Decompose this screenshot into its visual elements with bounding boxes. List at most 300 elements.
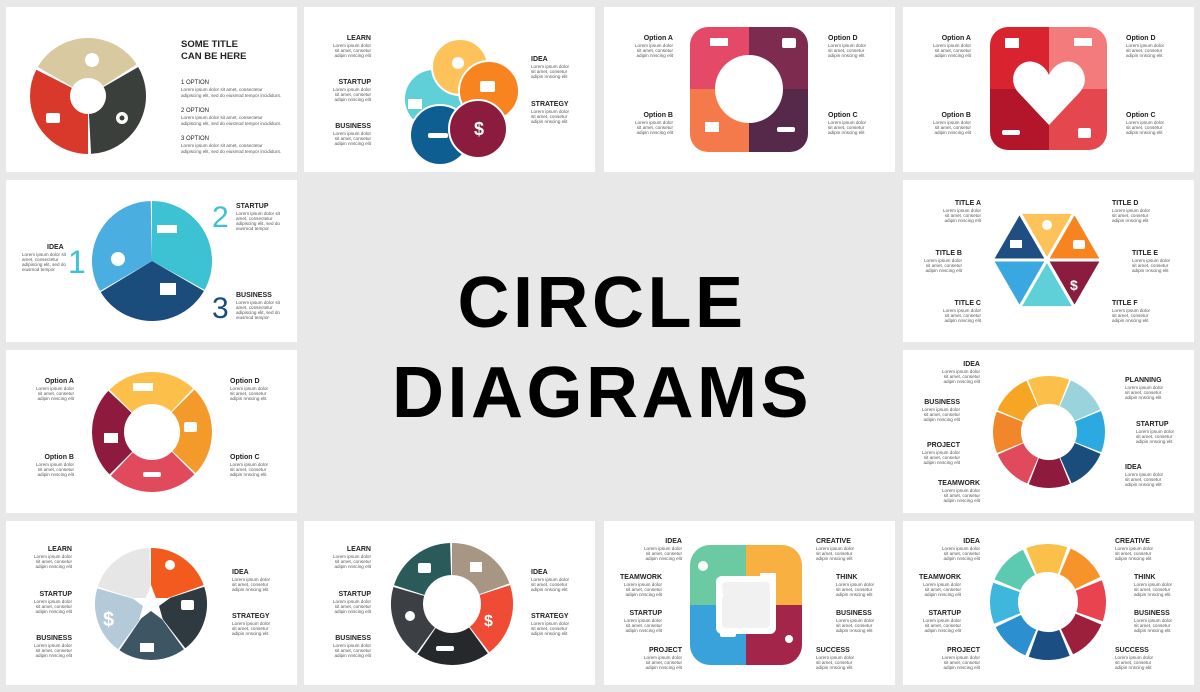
labels: IDEA	[963, 361, 980, 368]
labels: IDEA	[665, 538, 682, 545]
labels: sit amet, consetur	[944, 660, 980, 665]
panel: square weave	[604, 521, 895, 685]
labels: STARTUP	[629, 610, 662, 617]
labels: Lorem ipsum dolor	[1134, 618, 1173, 623]
labels: sit amet, consetur	[925, 587, 961, 592]
labels: TEAMWORK	[938, 480, 980, 487]
options text: 1 OPTION	[181, 80, 209, 86]
diagram: pie	[111, 220, 193, 302]
diagram: swirl ring	[994, 377, 1104, 487]
labels: Lorem ipsum dolor	[624, 582, 662, 587]
labels: adipin nnscing elit	[1125, 482, 1162, 487]
labels	[620, 538, 875, 670]
labels: adipin nnscing elit	[1126, 53, 1163, 58]
labels: sit amet, consetur	[944, 493, 980, 498]
labels: IDEA	[531, 569, 548, 576]
labels: sit amet, consetur	[1132, 263, 1169, 268]
labels: Lorem ipsum dolor	[230, 386, 269, 391]
labels: sit amet, consetur	[1134, 587, 1171, 592]
labels: BUSINESS	[924, 399, 960, 406]
labels: adipin nnscing elit	[230, 472, 267, 477]
labels: sit amet, consetur	[335, 559, 371, 564]
panel: blue pie	[6, 180, 297, 342]
labels: Lorem ipsum dolor	[635, 43, 673, 48]
labels: adipin nnscing elit	[1112, 218, 1149, 223]
labels: adipin nnscing elit	[924, 592, 962, 597]
labels: adipin nnscing elit	[943, 498, 981, 503]
labels: adipin nnscing elit	[836, 628, 873, 633]
labels: sit amet, consetur	[531, 582, 568, 587]
labels: sit amet, consetur	[935, 125, 971, 130]
title block	[297, 172, 903, 521]
labels: adipin nnscing elit	[35, 609, 73, 614]
labels: sit amet, consetur	[944, 551, 980, 556]
labels: adipin nnscing elit	[816, 665, 853, 670]
labels: sit amet, consetur	[828, 125, 865, 130]
labels: sit amet, consetur	[1126, 48, 1163, 53]
diagram: octagon ring	[990, 544, 1106, 660]
labels: Lorem ipsum dolor	[1125, 385, 1164, 390]
options text: adipiscing elit, sed do eiusmod tempor incididunt.	[181, 121, 281, 126]
labels: sit amet, consetur	[232, 582, 269, 587]
label: startup	[212, 201, 281, 234]
label: business: 3	[212, 292, 229, 325]
labels: STARTUP	[928, 610, 961, 617]
labels: sit amet, consetur	[828, 48, 865, 53]
labels: adipin nnscing elit	[35, 653, 73, 658]
labels: sit amet, consetur	[38, 391, 74, 396]
labels: Lorem ipsum dolor	[933, 43, 971, 48]
title block: CIRCLE	[458, 263, 746, 343]
labels: Lorem ipsum dolor	[333, 599, 371, 604]
labels: adipin nnscing elit	[944, 218, 982, 223]
panel: octagon segments	[903, 521, 1194, 685]
labels: sit amet, consetur	[924, 412, 960, 417]
labels: Lorem ipsum dolor	[624, 618, 662, 623]
labels: Lorem ipsum dolor	[828, 43, 867, 48]
labels: Lorem ipsum dolor	[635, 120, 673, 125]
labels: adipin nnscing elit	[1134, 592, 1171, 597]
labels: Lorem ipsum dolor	[1126, 43, 1165, 48]
icons	[46, 53, 128, 124]
labels: Lorem ipsum dolor	[943, 308, 981, 313]
labels left: sit amet, consetur	[335, 136, 371, 141]
labels: PROJECT	[927, 442, 961, 449]
options text: 2 OPTION	[181, 108, 209, 114]
label: startup: eiusmod tempor	[236, 226, 269, 231]
labels: Option A	[45, 378, 74, 385]
labels: Lorem ipsum dolor	[922, 407, 960, 412]
options text: adipiscing elit, sed do eiusmod tempor incididunt.	[181, 93, 281, 98]
diagram: puzzle ring	[389, 541, 515, 667]
labels: Option C	[1126, 112, 1156, 119]
labels: IDEA	[1125, 464, 1142, 471]
labels: adipin nnscing elit	[334, 564, 372, 569]
labels: Lorem ipsum dolor	[1125, 472, 1164, 477]
panel: eight swirl	[903, 350, 1194, 513]
label: idea: eiusmod tempor	[22, 267, 55, 272]
labels: sit amet, consetur	[626, 587, 662, 592]
label: business: amet, consectetur	[236, 305, 273, 310]
panel: star circle: $	[103, 609, 114, 631]
options text: Lorem ipsum dolor sit amet, consectetur	[181, 143, 263, 148]
labels left: adipin nnscing elit	[334, 53, 372, 58]
labels: SUCCESS	[1115, 647, 1149, 654]
labels: Option D	[230, 378, 260, 385]
labels: Lorem ipsum dolor	[923, 618, 961, 623]
labels: Lorem ipsum dolor	[933, 120, 971, 125]
diagram: five-part pie	[112, 565, 190, 643]
label: business: BUSINESS	[236, 292, 272, 299]
labels: Lorem ipsum dolor	[1112, 308, 1151, 313]
title text: CAN BE HERE	[181, 51, 246, 62]
diagram: overlapping circles	[404, 39, 519, 165]
labels: sit amet, consetur	[637, 125, 673, 130]
labels: Option C	[828, 112, 858, 119]
labels: sit amet, consetur	[230, 391, 267, 396]
labels: sit amet, consetur	[646, 660, 682, 665]
labels: sit amet, consetur	[924, 455, 960, 460]
labels left: Lorem ipsum dolor	[333, 131, 371, 136]
labels: Lorem ipsum dolor	[1112, 208, 1151, 213]
label: idea: 1	[68, 244, 86, 280]
labels: Lorem ipsum dolor	[333, 554, 371, 559]
panel: star circle	[6, 521, 297, 685]
labels: Lorem ipsum dolor	[531, 621, 570, 626]
labels: SUCCESS	[816, 647, 850, 654]
labels left: STARTUP	[338, 79, 371, 86]
labels: Option A	[644, 35, 673, 42]
options text: Lorem ipsum dolor sit amet, consectetur	[181, 115, 263, 120]
labels: Lorem ipsum dolor	[1115, 655, 1154, 660]
labels left: sit amet, consetur	[335, 48, 371, 53]
labels: sit amet, consetur	[944, 374, 980, 379]
labels: TITLE A	[955, 200, 981, 207]
labels: adipin nnscing elit	[1132, 268, 1169, 273]
diagram: square weave: $	[716, 585, 724, 601]
options text: adipiscing elit, sed do eiusmod tempor incididunt.	[181, 149, 281, 154]
labels: IDEA	[963, 538, 980, 545]
diagram: ring	[90, 370, 214, 494]
labels: adipin nnscing elit	[625, 592, 663, 597]
labels: sit amet, consetur	[945, 313, 981, 318]
labels: LEARN	[347, 546, 371, 553]
labels: sit amet, consetur	[531, 626, 568, 631]
labels: IDEA	[232, 569, 249, 576]
label: startup: adipiscing elit, sed do	[236, 221, 280, 226]
labels: Lorem ipsum dolor	[836, 618, 875, 623]
panel: five circles	[304, 7, 595, 172]
labels: Lorem ipsum dolor	[1134, 582, 1173, 587]
labels: adipin nnscing elit	[836, 592, 873, 597]
panel: hexagon triangles	[903, 180, 1194, 342]
labels: PROJECT	[649, 647, 683, 654]
labels: Lorem ipsum dolor	[922, 450, 960, 455]
labels: adipin nnscing elit	[636, 130, 674, 135]
labels	[933, 35, 1165, 135]
labels: sit amet, consetur	[1136, 434, 1173, 439]
labels: Option D	[828, 35, 858, 42]
labels: Lorem ipsum dolor	[34, 554, 72, 559]
labels	[635, 35, 867, 135]
labels: STRATEGY	[232, 613, 270, 620]
labels: sit amet, consetur	[335, 648, 371, 653]
labels: adipin nnscing elit	[645, 665, 683, 670]
labels: CREATIVE	[816, 538, 851, 545]
labels: adipin nnscing elit	[816, 556, 853, 561]
labels: STARTUP	[338, 591, 371, 598]
labels right: sit amet, consetur	[531, 69, 568, 74]
labels left: Lorem ipsum dolor	[333, 87, 371, 92]
labels: adipin nnscing elit	[934, 130, 972, 135]
labels: sit amet, consetur	[1134, 623, 1171, 628]
panel: puzzle ring	[304, 521, 595, 685]
labels right: Lorem ipsum dolor	[531, 109, 570, 114]
labels: TITLE D	[1112, 200, 1138, 207]
labels: sit amet, consetur	[1115, 551, 1152, 556]
labels: adipin nnscing elit	[1136, 439, 1173, 444]
labels: LEARN	[48, 546, 72, 553]
label: startup: Lorem ipsum dolor sit	[236, 211, 281, 216]
labels: adipin nnscing elit	[1115, 665, 1152, 670]
labels: Option B	[44, 454, 74, 461]
labels left	[333, 35, 372, 146]
labels: Lorem ipsum dolor	[232, 577, 271, 582]
labels: adipin nnscing elit	[923, 417, 961, 422]
labels: sit amet, consetur	[935, 48, 971, 53]
panel: puzzle ring: $	[484, 613, 493, 630]
labels: adipin nnscing elit	[232, 587, 269, 592]
labels: adipin nnscing elit	[1125, 395, 1162, 400]
labels right	[531, 56, 570, 124]
labels: Lorem ipsum dolor	[816, 546, 855, 551]
labels: Lorem ipsum dolor	[836, 582, 875, 587]
labels: Option D	[1126, 35, 1156, 42]
labels: STRATEGY	[531, 613, 569, 620]
labels: TEAMWORK	[620, 574, 662, 581]
labels: sit amet, consetur	[836, 587, 873, 592]
labels: sit amet, consetur	[836, 623, 873, 628]
labels: Lorem ipsum dolor	[1132, 258, 1171, 263]
labels: Lorem ipsum dolor	[942, 655, 980, 660]
labels: TITLE B	[936, 250, 962, 257]
labels: sit amet, consetur	[1112, 313, 1149, 318]
labels	[924, 200, 1171, 323]
labels: sit amet, consetur	[1112, 213, 1149, 218]
labels: STARTUP	[1136, 421, 1169, 428]
labels: STARTUP	[39, 591, 72, 598]
labels: BUSINESS	[335, 635, 371, 642]
labels right: adipin nnscing elit	[531, 74, 568, 79]
label: idea: amet, consectetur	[22, 257, 59, 262]
labels: adipin nnscing elit	[944, 318, 982, 323]
title block: DIAGRAMS	[392, 353, 812, 433]
labels: PROJECT	[947, 647, 981, 654]
labels: BUSINESS	[1134, 610, 1170, 617]
labels	[36, 378, 269, 477]
labels: sit amet, consetur	[626, 623, 662, 628]
labels: sit amet, consetur	[646, 551, 682, 556]
labels: sit amet, consetur	[38, 467, 74, 472]
label: business: Lorem ipsum dolor sit	[236, 300, 281, 305]
labels: TEAMWORK	[919, 574, 961, 581]
labels: sit amet, consetur	[36, 604, 72, 609]
labels: adipin nnscing elit	[37, 472, 75, 477]
labels: adipin nnscing elit	[943, 665, 981, 670]
label: idea: IDEA	[47, 244, 64, 251]
labels: TITLE E	[1132, 250, 1158, 257]
labels: Lorem ipsum dolor	[942, 369, 980, 374]
labels: adipin nnscing elit	[924, 628, 962, 633]
labels: Lorem ipsum dolor	[1115, 546, 1154, 551]
labels: adipin nnscing elit	[828, 53, 865, 58]
labels: adipin nnscing elit	[1126, 130, 1163, 135]
labels: sit amet, consetur	[36, 559, 72, 564]
labels: TITLE C	[955, 300, 981, 307]
labels: Lorem ipsum dolor	[943, 208, 981, 213]
diagram: rounded square quadrants	[690, 27, 808, 152]
labels: Lorem ipsum dolor	[942, 546, 980, 551]
labels: adipin nnscing elit	[828, 130, 865, 135]
labels: Lorem ipsum dolor	[36, 386, 74, 391]
labels	[34, 546, 271, 658]
title text: SOME TITLE	[181, 39, 238, 50]
labels	[922, 361, 1175, 503]
labels: adipin nnscing elit	[334, 653, 372, 658]
labels: adipin nnscing elit	[943, 556, 981, 561]
labels: adipin nnscing elit	[923, 460, 961, 465]
labels: sit amet, consetur	[816, 660, 853, 665]
labels: sit amet, consetur	[816, 551, 853, 556]
labels: adipin nnscing elit	[232, 631, 269, 636]
labels: adipin nnscing elit	[925, 268, 963, 273]
panel: square heart	[903, 7, 1194, 172]
labels: TITLE F	[1112, 300, 1138, 307]
labels: adipin nnscing elit	[1134, 628, 1171, 633]
labels: adipin nnscing elit	[1112, 318, 1149, 323]
labels right: Lorem ipsum dolor	[531, 64, 570, 69]
diagram: triangle ring	[36, 44, 140, 148]
labels: adipin nnscing elit	[625, 628, 663, 633]
labels: PLANNING	[1125, 377, 1162, 384]
labels left: sit amet, consetur	[335, 92, 371, 97]
labels: CREATIVE	[1115, 538, 1150, 545]
labels: Option C	[230, 454, 260, 461]
label: business: eiusmod tempor	[236, 315, 269, 320]
labels: Option B	[941, 112, 971, 119]
label: idea: Lorem ipsum dolor sit	[22, 252, 67, 257]
diagram: square weave	[690, 545, 802, 665]
labels left: LEARN	[347, 35, 371, 42]
labels: sit amet, consetur	[945, 213, 981, 218]
labels: sit amet, consetur	[335, 604, 371, 609]
labels: Lorem ipsum dolor	[1136, 429, 1175, 434]
labels: sit amet, consetur	[1125, 477, 1162, 482]
labels: THINK	[836, 574, 857, 581]
panel: hexagon triangles: $	[1070, 277, 1078, 293]
labels: sit amet, consetur	[926, 263, 962, 268]
labels right: IDEA	[531, 56, 548, 63]
labels: adipin nnscing elit	[943, 379, 981, 384]
labels: sit amet, consetur	[232, 626, 269, 631]
label: startup: STARTUP	[236, 203, 269, 210]
label: idea: adipiscing elit, sed do	[22, 262, 66, 267]
labels: Lorem ipsum dolor	[923, 582, 961, 587]
labels left: adipin nnscing elit	[334, 97, 372, 102]
labels: Option A	[942, 35, 971, 42]
labels: Lorem ipsum dolor	[34, 599, 72, 604]
icons: $	[474, 119, 484, 139]
labels: Lorem ipsum dolor	[34, 643, 72, 648]
labels: Lorem ipsum dolor	[333, 643, 371, 648]
labels: Option B	[643, 112, 673, 119]
options text: Lorem ipsum dolor sit amet, consectetur	[181, 87, 263, 92]
labels: Lorem ipsum dolor	[1126, 120, 1165, 125]
label: business	[212, 292, 281, 325]
labels: adipin nnscing elit	[636, 53, 674, 58]
labels: Lorem ipsum dolor	[942, 488, 980, 493]
labels: Lorem ipsum dolor	[816, 655, 855, 660]
labels: adipin nnscing elit	[934, 53, 972, 58]
labels: BUSINESS	[836, 610, 872, 617]
label: startup: amet, consectetur	[236, 216, 273, 221]
diagram: rounded square with heart	[990, 27, 1107, 150]
labels	[919, 538, 1173, 670]
labels: Lorem ipsum dolor	[531, 577, 570, 582]
labels: sit amet, consetur	[1125, 390, 1162, 395]
panel: square swirl A	[604, 7, 895, 172]
diagram: hexagon	[992, 212, 1102, 308]
label: business: adipiscing elit, sed do	[236, 310, 280, 315]
labels right: adipin nnscing elit	[531, 119, 568, 124]
labels: adipin nnscing elit	[230, 396, 267, 401]
labels left: adipin nnscing elit	[334, 141, 372, 146]
labels: sit amet, consetur	[1115, 660, 1152, 665]
label: startup: 2	[212, 201, 229, 234]
labels: Lorem ipsum dolor	[828, 120, 867, 125]
options text	[181, 80, 281, 154]
labels: BUSINESS	[36, 635, 72, 642]
labels: sit amet, consetur	[1126, 125, 1163, 130]
labels: sit amet, consetur	[230, 467, 267, 472]
labels: Lorem ipsum dolor	[230, 462, 269, 467]
labels: sit amet, consetur	[637, 48, 673, 53]
labels: Lorem ipsum dolor	[232, 621, 271, 626]
labels left: Lorem ipsum dolor	[333, 43, 371, 48]
labels: THINK	[1134, 574, 1155, 581]
icons	[408, 57, 495, 139]
label: idea	[22, 244, 86, 280]
labels: adipin nnscing elit	[645, 556, 683, 561]
labels: adipin nnscing elit	[334, 609, 372, 614]
labels: Lorem ipsum dolor	[924, 258, 962, 263]
labels: Lorem ipsum dolor	[644, 546, 682, 551]
labels: adipin nnscing elit	[37, 396, 75, 401]
labels: Lorem ipsum dolor	[644, 655, 682, 660]
labels: adipin nnscing elit	[531, 587, 568, 592]
labels right: sit amet, consetur	[531, 114, 568, 119]
labels: adipin nnscing elit	[35, 564, 73, 569]
labels: sit amet, consetur	[925, 623, 961, 628]
labels	[333, 546, 570, 658]
labels left: BUSINESS	[335, 123, 371, 130]
labels: sit amet, consetur	[36, 648, 72, 653]
panel: triangle cycle	[6, 7, 297, 172]
labels right: STRATEGY	[531, 101, 569, 108]
labels: adipin nnscing elit	[531, 631, 568, 636]
panel: four-part ring	[6, 350, 297, 513]
title text	[181, 39, 246, 62]
